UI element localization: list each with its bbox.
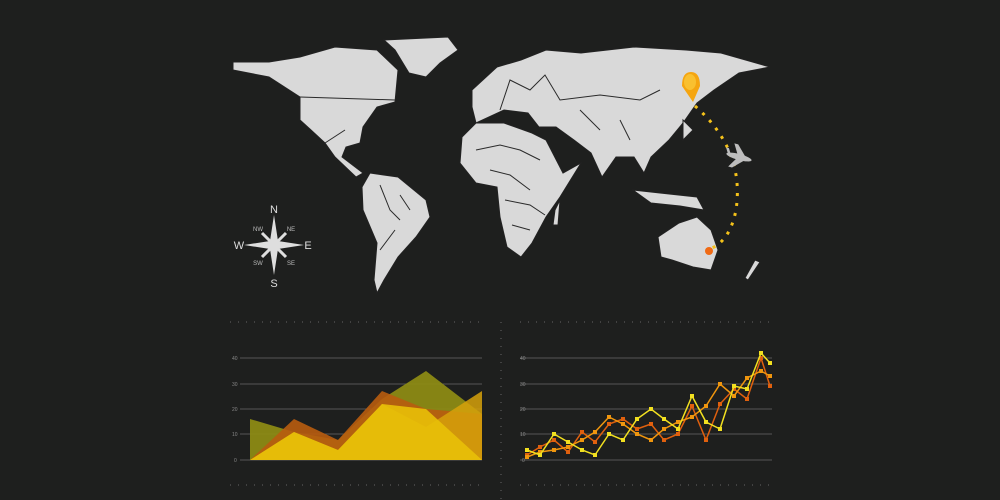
compass: W bbox=[234, 240, 245, 252]
compass: E bbox=[304, 240, 312, 252]
islands bbox=[633, 190, 704, 210]
area chart: 0 bbox=[234, 458, 237, 464]
line chart: 40 bbox=[520, 356, 526, 362]
world map bbox=[233, 37, 770, 293]
compass: SE bbox=[287, 261, 295, 267]
line chart: 30 bbox=[520, 382, 526, 388]
north america bbox=[233, 47, 398, 177]
south america bbox=[362, 173, 430, 293]
area chart: 10 bbox=[232, 432, 238, 438]
greenland bbox=[384, 37, 458, 77]
icon: pin bbox=[682, 72, 700, 102]
icon: plane bbox=[721, 142, 755, 172]
borders bbox=[300, 75, 660, 250]
eurasia bbox=[472, 47, 770, 177]
compass: N bbox=[270, 204, 278, 216]
line chart bbox=[520, 353, 772, 464]
line chart: 20 bbox=[520, 407, 526, 413]
icon: destination dot bbox=[705, 247, 713, 255]
area chart: 20 bbox=[232, 407, 238, 413]
compass bbox=[234, 204, 312, 290]
australia bbox=[658, 217, 718, 270]
africa bbox=[460, 123, 581, 257]
area chart: 40 bbox=[232, 356, 238, 362]
compass: NE bbox=[287, 227, 295, 233]
line chart: 10 bbox=[520, 432, 526, 438]
compass: SW bbox=[253, 261, 263, 267]
line chart: 0 bbox=[522, 458, 525, 464]
compass: NW bbox=[253, 227, 263, 233]
flight route bbox=[682, 72, 755, 255]
compass: S bbox=[270, 278, 278, 290]
area chart: 30 bbox=[232, 382, 238, 388]
area chart bbox=[232, 356, 482, 464]
dotted frame lines bbox=[230, 322, 770, 500]
